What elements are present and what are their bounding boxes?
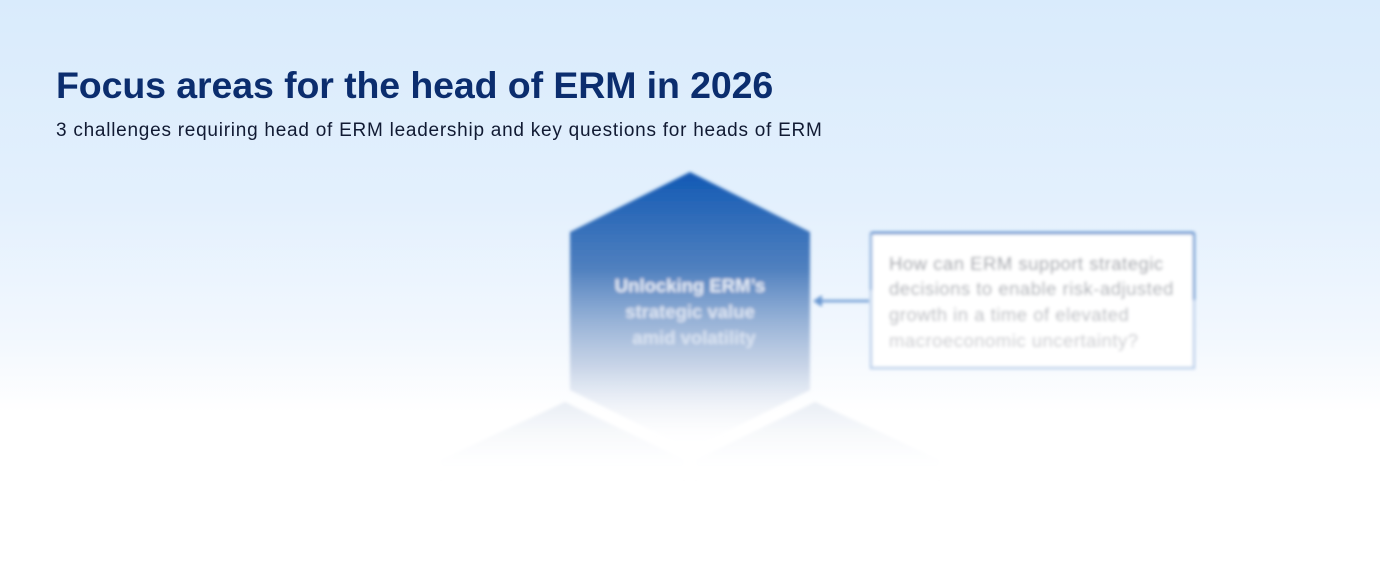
hexagon: main challenge <box>570 172 810 450</box>
question text: How can ERM support strategic <box>889 253 1164 274</box>
question text: decisions to enable risk-adjusted <box>889 278 1174 299</box>
hexagon: main challenge: strategic value <box>625 301 755 322</box>
hexagon: lower left (faded) <box>440 402 685 480</box>
subtitle: 3 challenges requiring head of ERM leadership and key questions for heads of ERM <box>56 120 823 141</box>
hexagon: main challenge: amid volatility <box>632 327 756 348</box>
title: Focus areas for the head of ERM in 2026 <box>56 64 773 106</box>
question box <box>871 233 1194 368</box>
question text: growth in a time of elevated <box>889 304 1129 325</box>
hexagon: lower right (faded) <box>695 402 940 480</box>
question text: macroeconomic uncertainty? <box>889 330 1138 351</box>
hexagon label: Unlocking ERM’s <box>615 275 765 296</box>
arrow: question to hexagon <box>813 295 870 307</box>
